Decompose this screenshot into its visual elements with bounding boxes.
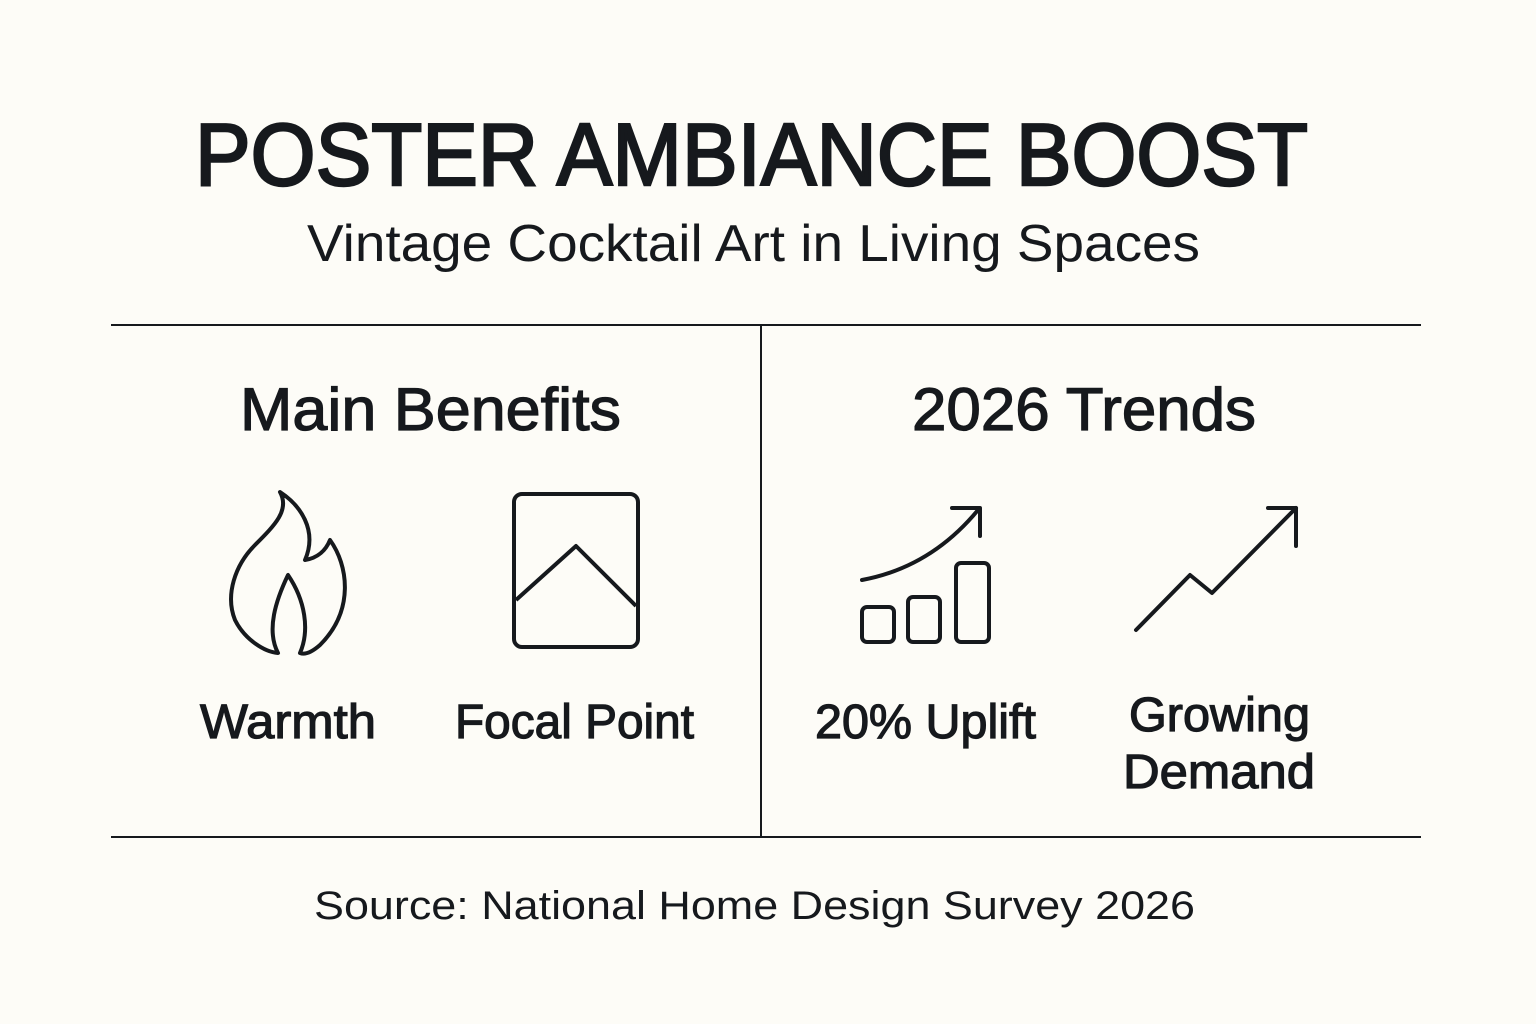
icon: picture frame bbox=[514, 494, 638, 647]
icon: trend arrow bbox=[1136, 508, 1296, 630]
label: growing demand: Growing bbox=[1129, 689, 1310, 742]
title: POSTER AMBIANCE BOOST bbox=[195, 105, 1308, 204]
label: warmth: Warmth bbox=[200, 696, 376, 749]
subtitle: Vintage Cocktail Art in Living Spaces bbox=[307, 215, 1200, 273]
icon: bar chart uplift bbox=[862, 508, 989, 642]
panel: 2026 trends bbox=[815, 376, 1323, 799]
source footnote: Source: National Home Design Survey 2026 bbox=[314, 884, 1195, 928]
heading: main benefits: Main Benefits bbox=[240, 376, 621, 443]
panel: main benefits bbox=[200, 376, 694, 749]
icon: flame bbox=[231, 492, 345, 654]
heading: 2026 trends: 2026 Trends bbox=[912, 376, 1256, 443]
label: focal point: Focal Point bbox=[455, 696, 694, 749]
label: 20% uplift: 20% Uplift bbox=[815, 696, 1036, 749]
label: growing demand: Demand bbox=[1123, 746, 1315, 799]
